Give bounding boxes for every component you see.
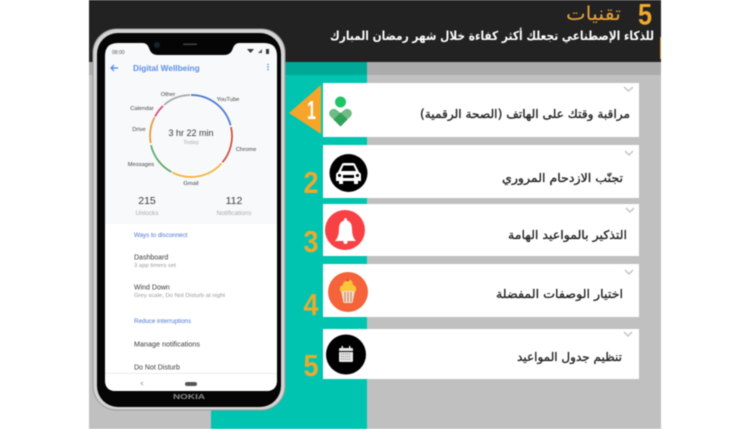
- ring labels: [128, 92, 256, 187]
- item 3: [304, 204, 639, 259]
- usage ring chart: [150, 95, 232, 177]
- ring labels: YouTube: [217, 97, 239, 103]
- item text: تجنّب الازدحام المروري: [502, 171, 623, 186]
- settings list: Reduce interruptions: [134, 318, 191, 325]
- item 1: [289, 83, 639, 137]
- item 5: [304, 329, 639, 383]
- phone brand: NOKIA: [173, 392, 206, 401]
- heading: تقنيات: [566, 3, 621, 25]
- status bar: [112, 49, 269, 56]
- icon: calendar: [326, 334, 366, 374]
- unlocks and notifications: [135, 195, 251, 217]
- item text: مراقبة وقتك على الهاتف (الصحة الرقمية): [420, 107, 630, 122]
- item 4: [304, 264, 639, 322]
- chevron: [624, 332, 632, 336]
- ring labels: Calendar: [130, 106, 154, 112]
- background panels: [89, 0, 661, 429]
- item text: تنظيم جدول المواعيد: [517, 350, 622, 365]
- pointer with number 1: 1: [307, 95, 316, 125]
- icon: car: [330, 154, 368, 192]
- camera and speaker: [154, 42, 197, 48]
- status bar: 08:00: [112, 50, 125, 56]
- ring labels: Chrome: [236, 147, 256, 153]
- icon: bell: [325, 210, 365, 250]
- settings list: Dashboard: [134, 254, 168, 262]
- unlocks and notifications: 215: [138, 195, 156, 207]
- settings list: Ways to disconnect: [134, 232, 188, 239]
- chevron: [625, 151, 633, 155]
- settings list: [134, 232, 225, 372]
- number 4: 4: [304, 287, 319, 322]
- app bar: [111, 63, 269, 73]
- chevron: [626, 208, 634, 212]
- number 5: 5: [304, 348, 318, 383]
- icon: cupcake: [328, 272, 368, 312]
- ring labels: Other: [161, 92, 175, 98]
- card 1: [323, 83, 639, 137]
- card 5: [323, 329, 639, 379]
- icon: digital wellbeing: [329, 96, 352, 126]
- ring labels: Gmail: [183, 181, 199, 187]
- pointer with number 1: [289, 85, 321, 134]
- settings list: Grey scale, Do Not Disturb at night: [134, 293, 225, 299]
- card 3: [323, 204, 639, 256]
- chevron: [625, 270, 633, 274]
- phone screen: [105, 43, 277, 391]
- total time: 3 hr 22 min: [168, 128, 214, 138]
- unlocks and notifications: 112: [226, 195, 243, 207]
- app bar: Digital Wellbeing: [133, 63, 200, 73]
- header band: [89, 0, 661, 62]
- subheading: للذكاء الإصطناعي تجعلك أكثر كفاءة خلال شهر رمضان المبارك: [330, 27, 654, 43]
- item 2: [304, 145, 639, 200]
- settings list: Wind Down: [134, 284, 170, 292]
- unlocks and notifications: Notifications: [217, 210, 251, 217]
- item text: التذكير بالمواعيد الهامة: [508, 228, 627, 243]
- ring labels: Drive: [132, 127, 146, 133]
- number 2: 2: [304, 165, 318, 200]
- phone body: [93, 29, 285, 410]
- card 2: [323, 145, 639, 198]
- number 3: 3: [304, 224, 318, 259]
- card 4: [323, 264, 639, 317]
- item text: اختيار الوصفات المفضلة: [496, 287, 623, 302]
- ring labels: Messages: [128, 162, 154, 168]
- phone mockup: [93, 29, 285, 410]
- navigation bar: [105, 373, 277, 386]
- settings list: Do Not Disturb: [134, 364, 180, 372]
- chevron: [624, 87, 633, 91]
- total time: Today: [183, 140, 199, 146]
- total time: [168, 128, 214, 146]
- settings list: 3 app timers set: [134, 263, 176, 269]
- settings list: Manage notifications: [134, 340, 200, 348]
- unlocks and notifications: Unlocks: [135, 210, 159, 217]
